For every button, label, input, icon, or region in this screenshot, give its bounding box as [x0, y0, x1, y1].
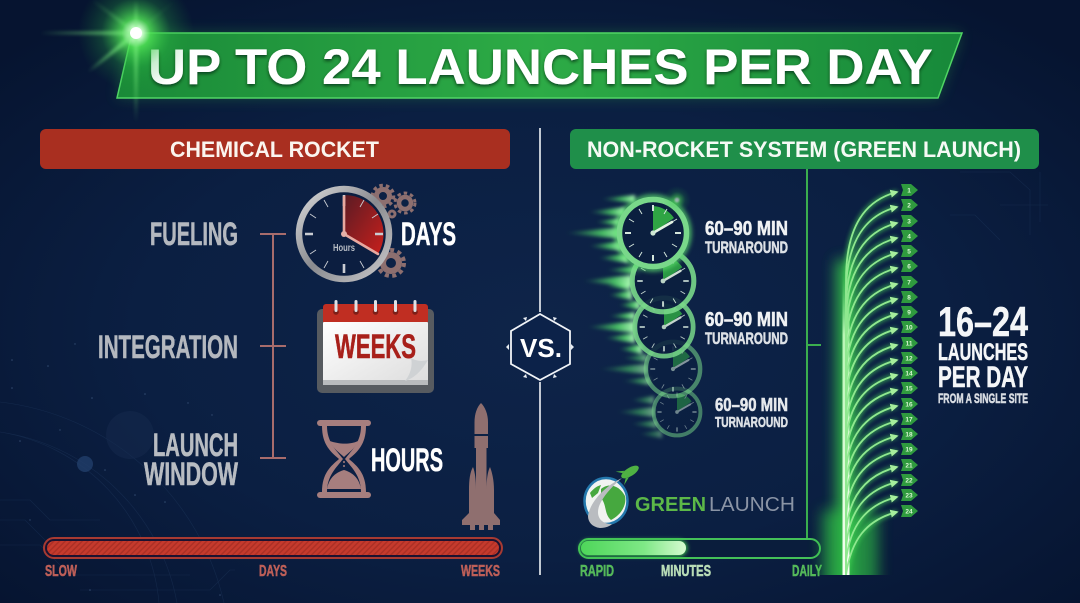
clock 1: [620, 200, 686, 266]
label: days: DAYS: [401, 216, 456, 252]
launch number tags: 16: [905, 401, 913, 408]
panel: non-rocket system: [564, 129, 1039, 600]
divider line with tick: [807, 169, 821, 540]
turnaround label 2: [705, 309, 788, 348]
launch number tags: 14: [905, 370, 913, 377]
icon: green star flare: [40, 0, 194, 122]
launch number tags: 3: [907, 218, 911, 225]
clock 5: [654, 389, 700, 435]
launch number tags: 9: [907, 309, 911, 316]
title banner: [117, 33, 962, 98]
launch number tags: 10: [905, 324, 913, 331]
launch number tags: [901, 184, 918, 517]
bar label: minutes: MINUTES: [661, 563, 711, 580]
speed streaks: [564, 195, 662, 438]
turnaround label 2: TURNAROUND: [705, 330, 788, 348]
bracket connector: [260, 234, 286, 458]
background space decoration: [0, 172, 1048, 603]
icon: gears: [372, 186, 415, 276]
launch number tags: 23: [905, 492, 913, 499]
launch number tags: 21: [905, 462, 913, 469]
vs label: VS.: [520, 333, 562, 363]
red header: [40, 129, 510, 169]
title: UP TO 24 LAUNCHES PER DAY: [148, 39, 933, 95]
label: fueling: FUELING: [150, 216, 238, 252]
calendar label: WEEKS: [335, 328, 416, 366]
header label: CHEMICAL ROCKET: [170, 137, 380, 162]
launch number tags: 2: [907, 202, 911, 209]
launch number tags: 22: [905, 477, 913, 484]
launches per day callout: PER DAY: [938, 361, 1028, 394]
clock hours label: Hours: [333, 243, 355, 254]
launch number tags: 11: [906, 340, 913, 347]
label: launch window: LAUNCH: [153, 427, 238, 463]
rapid progress bar: [579, 539, 820, 558]
logo wordmark: LAUNCH: [709, 494, 795, 516]
launch number tags: 15: [905, 385, 913, 392]
label: launch window: WINDOW: [144, 456, 239, 492]
launch number tags: 6: [907, 263, 911, 270]
turnaround label 1: 60–90 MIN: [705, 218, 788, 240]
launches per day callout: FROM A SINGLE SITE: [938, 391, 1028, 406]
panel: chemical rocket: [40, 129, 510, 580]
bar label: daily: DAILY: [792, 563, 822, 580]
logo wordmark: GREEN: [635, 494, 706, 516]
launches per day callout: LAUNCHES: [938, 339, 1028, 366]
slow progress bar: [44, 538, 502, 558]
clock glow: [617, 197, 689, 269]
launch trajectory arrows: [846, 192, 897, 575]
launch number tags: 17: [905, 416, 913, 423]
bar label: weeks: WEEKS: [461, 563, 500, 580]
turnaround label 1: [705, 218, 788, 257]
vs hexagon badge: [506, 314, 574, 380]
clock 2: [632, 250, 694, 312]
launch number tags: 19: [905, 446, 913, 453]
launch number tags: 7: [907, 279, 911, 286]
turnaround label 3: 60–90 MIN: [715, 395, 788, 415]
clock flare: [663, 186, 691, 214]
icon: clock: [299, 189, 389, 279]
turnaround label 3: TURNAROUND: [715, 414, 788, 431]
logo wordmark: [635, 494, 795, 516]
turnaround label 3: [715, 395, 788, 431]
green header: [570, 129, 1039, 169]
launch number tags: 5: [907, 248, 911, 255]
bar label: slow: SLOW: [45, 563, 78, 580]
icon: calendar: [317, 300, 434, 393]
bar label: rapid: RAPID: [580, 563, 614, 580]
header label: NON-ROCKET SYSTEM (GREEN LAUNCH): [587, 137, 1021, 162]
launch number tags: 4: [907, 233, 911, 240]
label: integration: INTEGRATION: [98, 329, 238, 365]
clock 3: [635, 298, 693, 356]
icon: rocket: [462, 403, 500, 530]
clock 4: [646, 342, 700, 396]
launch number tags: 8: [907, 294, 911, 301]
launch number tags: 18: [905, 431, 913, 438]
turnaround label 2: 60–90 MIN: [705, 309, 788, 331]
bar label: days: DAYS: [259, 563, 287, 580]
launch beam glow: [822, 192, 897, 600]
icon: hourglass: [317, 420, 371, 498]
turnaround label 1: TURNAROUND: [705, 239, 788, 257]
launches per day callout: 16–24: [938, 298, 1028, 345]
launch number tags: 12: [905, 355, 913, 362]
label: launch window: [144, 427, 239, 492]
launch number tags: 24: [905, 508, 913, 515]
label: hours: HOURS: [371, 442, 443, 478]
launches per day callout: [938, 298, 1028, 406]
green launch logo: [584, 460, 795, 528]
launch number tags: 1: [907, 187, 911, 194]
